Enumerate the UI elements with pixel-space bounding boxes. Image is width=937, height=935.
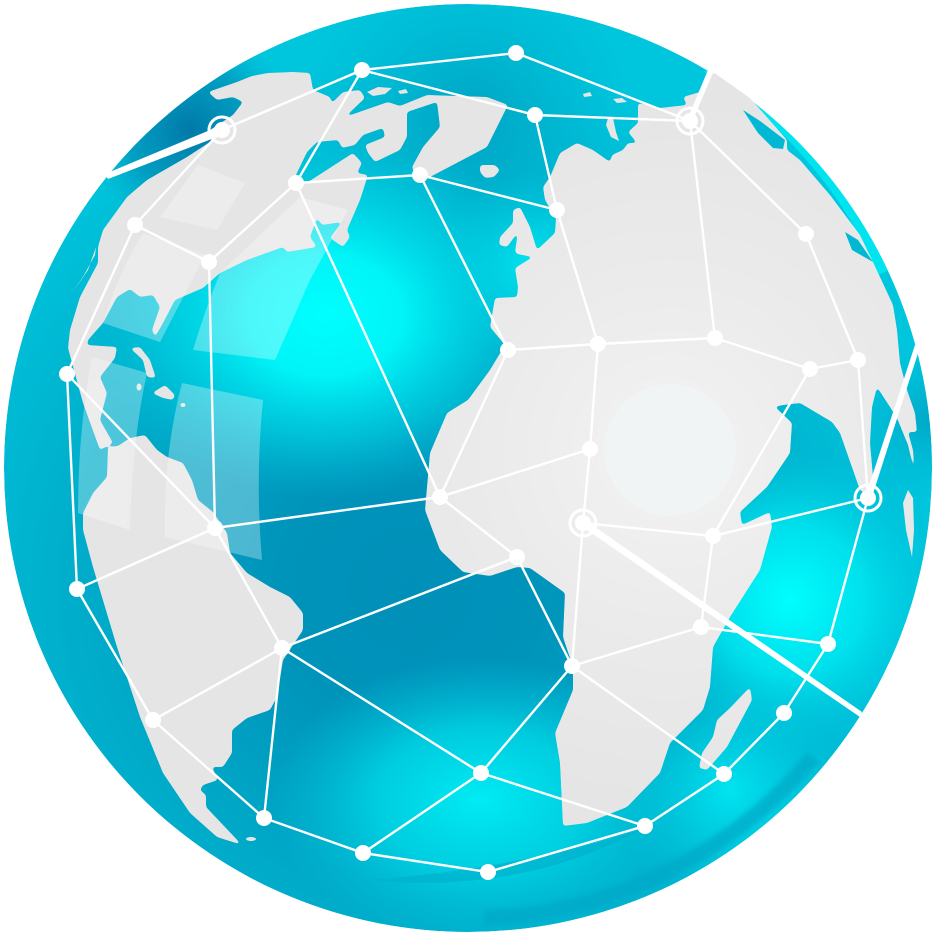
continents [68,72,917,845]
land: Europe, Asia and Africa [425,72,917,826]
beam: lower right [581,520,862,717]
network connection lines [67,53,868,872]
hub: Africa [570,510,596,536]
land: Cuba [130,347,156,378]
land: North and Central America with Greenland [68,72,508,450]
hub: India [855,485,881,511]
thick data beams [105,70,920,717]
land: small Caribbean islands [136,384,256,841]
beam: top right [687,70,713,122]
beam: left [105,128,222,179]
glass window reflections [78,165,348,560]
beam: right [865,345,920,500]
land: Baja sliver [72,247,96,293]
land: Iceland [480,165,500,178]
land: Sumatra sliver [903,490,914,557]
central sun glare [604,384,736,516]
hub: Russia [677,108,703,134]
land: Arctic islands [367,87,627,141]
land: Hispaniola [152,385,175,400]
network nodes [59,45,866,880]
ringed hub nodes [209,108,881,536]
hub: North America [209,117,235,143]
land: South America [83,435,303,845]
land: Madagascar [699,687,752,770]
sea slits on land [743,110,873,262]
land masses [68,72,917,845]
